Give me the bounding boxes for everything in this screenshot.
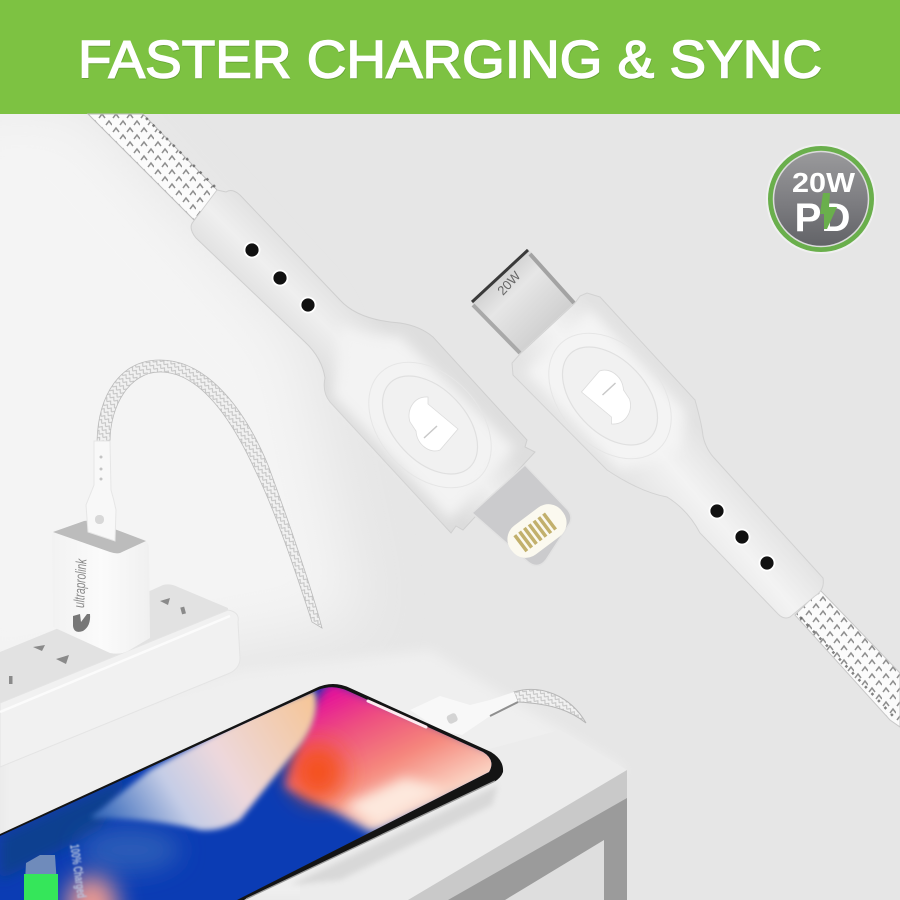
boot dots: [100, 456, 102, 480]
screen wallpaper: [0, 680, 505, 900]
20W PD badge: [766, 144, 876, 254]
speaker highlight: [368, 701, 426, 727]
cable with USB-C connector: [472, 249, 900, 727]
oval emboss: [382, 376, 478, 474]
USB-C metal plug: [472, 249, 575, 353]
connector body: [512, 293, 823, 618]
charger brick: [52, 521, 150, 654]
status battery: [24, 855, 58, 900]
thin cable to charger: [86, 360, 322, 628]
pale band: [90, 690, 316, 830]
outer emboss ring: [368, 362, 492, 488]
oval emboss: [562, 346, 658, 446]
title shadow: FASTER CHARGING & SYNC: [78, 32, 822, 90]
orange hot spot: [292, 744, 344, 800]
logo: [582, 370, 631, 424]
braided cable section: [88, 114, 219, 220]
plug label: 20W: [494, 268, 524, 298]
sockets: [9, 598, 186, 684]
warm wash: [285, 680, 505, 832]
dark blue corner: [0, 775, 130, 880]
pink bloom bottom left: [66, 875, 118, 900]
table edge box: [408, 770, 627, 900]
strain relief dots: [710, 504, 774, 570]
charger top face: [53, 521, 146, 553]
pale bottom-right: [345, 778, 445, 826]
cable at phone: [410, 689, 586, 735]
head highlight: [332, 325, 515, 520]
header banner: [0, 0, 900, 114]
power strip: [0, 584, 240, 767]
20W PD badge: PD: [794, 196, 850, 240]
lightning tip: [472, 465, 573, 566]
head highlight: [525, 310, 685, 470]
outer emboss ring: [548, 333, 672, 459]
braided cable section: [795, 590, 900, 727]
logo: [409, 397, 458, 451]
brand logo: [73, 614, 90, 632]
boot: [86, 441, 116, 541]
lower table surface: [9, 658, 548, 891]
table surface front corner: [300, 730, 627, 900]
lighter blue wash: [80, 828, 180, 872]
connector body: [191, 190, 535, 533]
strain relief dots: [244, 242, 316, 312]
smartphone: [0, 680, 505, 900]
20W PD badge: 20W: [792, 167, 856, 198]
strip top face: [0, 584, 228, 703]
background glow left: [0, 114, 342, 652]
strip front face: [0, 610, 240, 767]
cable with lightning connector: [88, 114, 573, 566]
boot logo: [95, 515, 104, 524]
phone body: [0, 684, 503, 900]
brand text: ultraprolink: [71, 557, 91, 608]
phone shadow: [290, 785, 498, 885]
icon: lightning bolt: [820, 193, 837, 229]
title: FASTER CHARGING & SYNC: [78, 30, 822, 90]
